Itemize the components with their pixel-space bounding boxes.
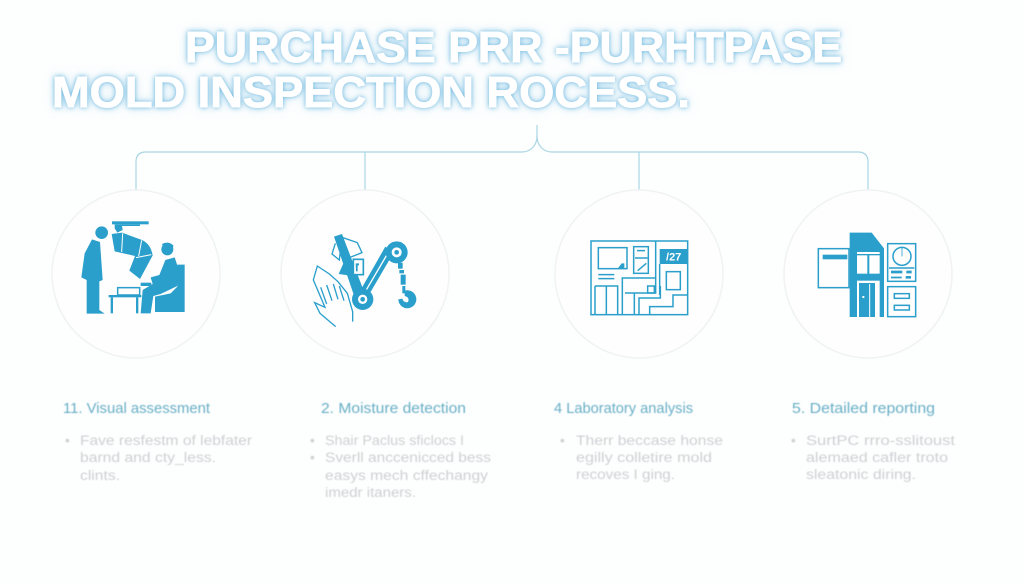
title [52,23,842,117]
step 4 text: Therr beccase honse [576,433,723,448]
step 5 text: alemaed cafler troto [806,450,948,465]
step 1 text [65,433,253,483]
step 2 text: imedr itaners. [325,485,416,500]
step 5 circle [784,190,952,358]
panel: step 2 moisture detection [281,190,491,500]
step 4 circle [555,190,723,358]
step 5 text: SurtPC rrro-sslitoust [806,433,955,448]
step 2 text: easys mech cffechangy [325,468,488,483]
panel: step 5 detailed reporting [784,190,955,482]
step 5 heading: 5. Detailed reporting [792,401,935,417]
step 2 text [310,433,491,500]
title: PURCHASE PRR -PURHTPASE [185,23,842,72]
step 2 text: • [310,433,315,448]
step 2 heading: 2. Moisture detection [321,401,466,417]
icon: hand and probe arm [313,234,416,327]
title: MOLD INSPECTION ROCESS. [52,68,690,117]
step 2 circle [281,190,449,358]
step 4 text: recoves I ging. [576,467,675,482]
step 1 heading: 11. Visual assessment [63,401,210,417]
step 4 text: egilly colletire mold [576,450,712,465]
step 1 text: Fave resfestm of lebfater [80,433,253,448]
connector bracket [136,125,868,190]
icon: inspector and client with duct [81,221,185,314]
step 2 text: • [310,450,315,465]
step 2 text: Shair Paclus sficlocs I [325,433,464,448]
step 5 text [791,433,955,482]
step 4 heading: 4 Laboratory analysis [554,401,693,417]
step 2 text: Sverll anccenicced bess [325,450,491,465]
panel: step 4 laboratory analysis [554,190,723,482]
step 5 text: sleatonic diring. [806,467,916,482]
step 4 text [560,433,723,482]
step 1 text: clints. [80,468,120,483]
step 4 text: • [560,433,565,448]
icon: building and report panels [818,233,916,317]
step 1 text: • [65,433,70,448]
panel: step 1 visual assessment [52,190,253,483]
step 1 text: barnd and cty_less. [80,450,216,465]
step 5 text: • [791,433,796,448]
step 1 circle [52,190,220,358]
icon: laboratory floor plan: /27 [666,251,681,263]
icon: laboratory floor plan [591,241,688,315]
